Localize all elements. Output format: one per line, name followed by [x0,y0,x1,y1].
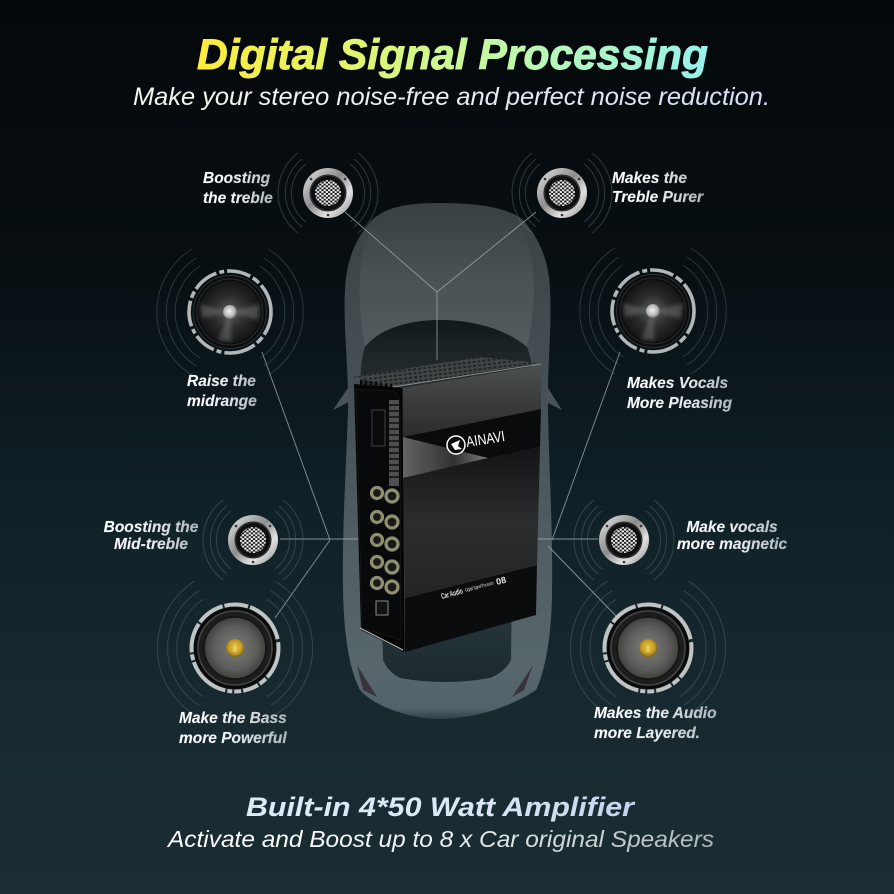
label: raise the midrange: Raise the [187,373,256,390]
AINAVI DSP amplifier [353,357,541,652]
amp RCA connectors [372,488,398,593]
speaker: tweeter top right [512,153,612,233]
amplifier heading: Built-in 4*50 Watt Amplifier [246,792,636,822]
speaker: tweeter mid right [574,500,674,580]
speaker: tweeter mid left [203,500,303,580]
label: boosting the treble: Boosting [203,170,271,187]
amp logo [447,428,506,454]
label: make the bass more powerful: more Powerful [179,730,287,747]
speaker: tweeter top left [278,153,378,233]
subtitle: Make your stereo noise-free and perfect noise reduction. [133,83,770,111]
amp bottom band [405,565,537,652]
label: makes vocals more pleasing: More Pleasing [627,395,733,412]
car rear window [382,590,512,682]
amp optical port [376,601,388,615]
car tail lights [357,665,533,697]
label: boosting the mid-treble: Boosting the [104,519,199,536]
speaker: bass left [157,581,313,715]
amp side panel [354,384,405,652]
speaker: bass right [570,581,726,715]
label: makes the audio more layered: more Layered. [594,725,700,742]
label: makes the audio more layered: Makes the Audio [594,705,717,722]
title: Digital Signal Processing [197,31,708,79]
speaker: midrange right [580,248,726,374]
amp front top panel [403,365,541,437]
amp terminal block [389,400,399,486]
label: boosting the treble: the treble [203,190,273,207]
car hood [360,210,534,347]
amplifier subheading: Activate and Boost up to 8 x Car original Speakers [166,826,715,852]
car windshield [360,320,534,395]
amp main panel [403,447,540,598]
label: makes the treble purer: Makes the [612,170,687,187]
amp product text: 08 [495,575,507,587]
label: make vocals more magnetic: more magnetic [677,536,788,553]
amp logo band [403,409,541,478]
label: makes vocals more pleasing: Makes Vocals [627,375,728,392]
amp product text: Car Audio [440,587,464,601]
amp product text [440,575,507,601]
label: makes the treble purer: Treble Purer [612,189,704,206]
illustration: car top view [333,203,562,719]
label: make vocals more magnetic: Make vocals [686,519,778,536]
speaker: midrange left [157,249,303,375]
car mirrors [333,385,562,410]
label: make the bass more powerful: Make the Bass [179,710,287,727]
amp product text: -Digital Signal Processor [464,580,495,594]
connector lines [262,212,620,618]
amp top face [353,357,540,387]
label: boosting the mid-treble: Mid-treble [114,536,188,553]
label: raise the midrange: midrange [187,393,257,410]
amp logo: AINAVI [465,428,506,451]
